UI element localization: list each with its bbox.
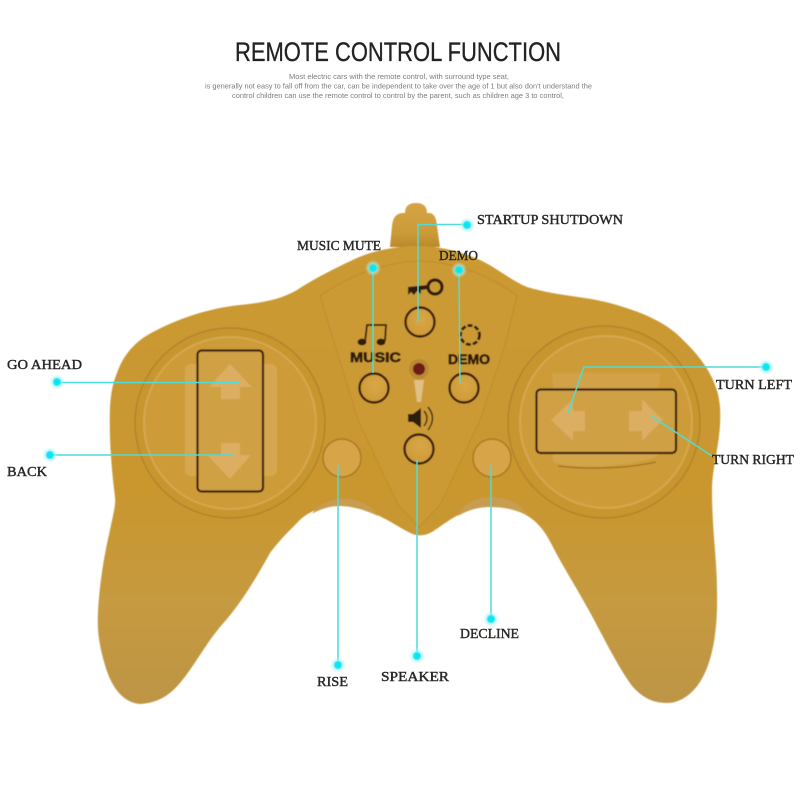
line: turn right	[651, 416, 712, 456]
line: turn left	[568, 367, 766, 413]
button demo	[450, 374, 478, 402]
power stem	[390, 203, 440, 247]
label: decline: DECLINE	[460, 627, 519, 642]
right rocker bottom shadow	[558, 462, 656, 468]
line: back	[50, 454, 234, 456]
label: startup shutdown: STARTUP SHUTDOWN	[477, 213, 623, 228]
label: turn right: TURN RIGHT	[712, 453, 794, 468]
right rocker guide top	[552, 373, 660, 392]
line: rise	[337, 465, 339, 665]
label: back: BACK	[7, 465, 47, 480]
lighter band above left arch	[312, 499, 378, 516]
arrow down	[207, 443, 251, 479]
indicator led	[409, 359, 429, 402]
label: turn left: TURN LEFT	[716, 378, 792, 393]
icon label: music: MUSIC	[350, 349, 401, 365]
button decline	[473, 439, 511, 477]
controller body	[98, 246, 720, 704]
button music	[360, 374, 388, 402]
line: startup	[418, 224, 467, 322]
button rise	[323, 439, 361, 477]
right rocker guide bottom	[553, 453, 660, 466]
button startup	[406, 308, 434, 336]
icon: speaker	[408, 407, 432, 430]
line: decline	[490, 465, 492, 619]
left rocker side guides	[185, 364, 277, 476]
description text	[205, 74, 592, 100]
icon label: demo: DEMO	[448, 351, 490, 367]
label: rise: RISE	[317, 675, 348, 690]
right dial	[508, 326, 700, 518]
arrow right	[629, 399, 663, 441]
line: go ahead	[57, 382, 240, 384]
left rocker	[198, 350, 263, 492]
label: go ahead: GO AHEAD	[7, 358, 82, 373]
right rocker	[536, 390, 676, 453]
label: demo: DEMO	[439, 249, 478, 264]
arrow up	[209, 364, 252, 399]
arrow left	[551, 399, 585, 441]
lighter band above right arch	[458, 497, 527, 516]
description text: control children can use the remote control to control by the parent, such as children age 3 to control,	[232, 93, 564, 100]
button speaker	[404, 434, 434, 464]
description text: is generally not easy to fall off from the car, can be independent to take over the age of 1 but also don't understand the	[205, 84, 592, 90]
left dial	[135, 328, 325, 518]
callout lines	[50, 224, 766, 665]
line: demo	[459, 270, 460, 384]
line: music mute	[372, 268, 374, 373]
icon: demo ring	[460, 326, 480, 344]
label: speaker: SPEAKER	[381, 670, 450, 685]
icon: music note	[358, 325, 386, 344]
label: music mute: MUSIC MUTE	[297, 239, 381, 254]
title: REMOTE CONTROL FUNCTION	[235, 37, 561, 67]
callout dots	[42, 217, 774, 673]
centre panel	[320, 261, 517, 527]
remote controller	[98, 203, 720, 704]
line: speaker	[416, 460, 418, 656]
description text: Most electric cars with the remote control, with surround type seat,	[289, 74, 509, 81]
icon: key	[408, 280, 442, 295]
